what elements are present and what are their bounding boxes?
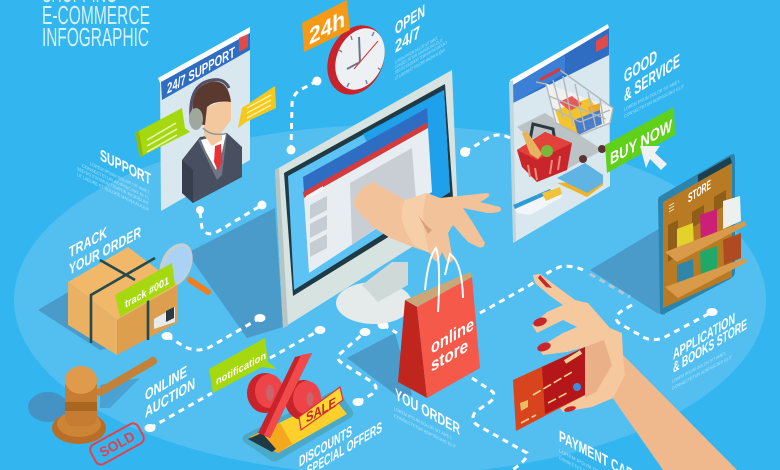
label: application & books store: APPLICATION [673, 310, 735, 364]
icon: 24h tag: 24h [309, 6, 345, 51]
label: payment card [559, 427, 641, 470]
label: you order: YOU ORDER [395, 384, 460, 439]
label: open 24/7: UT LABORE ET DOLORE MAGNA ALIQUA [395, 47, 445, 82]
label: support: SUPPORT [100, 146, 151, 189]
title: E-COMMERCE [42, 0, 150, 30]
ticket [513, 187, 562, 215]
label: application & books store: CONSECTETUR ADIPISICING ELIT [672, 354, 732, 392]
label: open 24/7: CONSECTETUR ADIPISICING ELIT, [395, 38, 443, 71]
buy now button [605, 107, 675, 173]
stand [336, 282, 412, 324]
panel: 24/7 support [135, 27, 276, 211]
label: support: SED DO EIUSMOD TEMPOR INCIDIDUNT [77, 166, 149, 207]
label: open 24/7 [395, 0, 447, 82]
panel: goods [509, 24, 613, 243]
shirt [557, 163, 603, 197]
buy now button: BUY NOW [610, 115, 673, 169]
label: online auction: AUCTION [145, 374, 195, 422]
label: open 24/7: LOREM IPSUM DOLOR SIT AMET, [395, 35, 438, 66]
label: track your order: YOUR ORDER [69, 223, 141, 279]
connector end dots [144, 76, 718, 432]
bezel [275, 70, 458, 328]
magnifier [153, 238, 208, 292]
shopping basket [517, 124, 572, 182]
label: good & service [624, 46, 684, 120]
shopping cart [517, 69, 613, 170]
percent sign [247, 353, 321, 438]
shopping bag: online [431, 313, 474, 359]
label: discounts & special offers [298, 419, 382, 470]
icon: clock [317, 16, 395, 104]
label: support [77, 146, 151, 213]
label: you order: CONSECTETUR ADIPISICING ELIT [394, 413, 456, 451]
label: support: CONSECTETUR ADIPISICING ELIT, [82, 163, 149, 202]
monitor [275, 70, 458, 328]
label: application & books store: LOREM IPSUM DOLOR SIT AMET, [672, 351, 726, 385]
label: application & books store [672, 310, 747, 392]
sale tag: SALE [306, 394, 336, 427]
label: support: UT LABORE ET DOLORE MAGNA ALIQUA [77, 172, 150, 213]
payment card [513, 347, 585, 431]
parcel box [68, 247, 178, 355]
label: you order [394, 384, 460, 451]
tablet store [658, 154, 747, 315]
dotted connectors [150, 81, 712, 470]
title [42, 0, 150, 52]
shopping bag: store [431, 335, 468, 377]
panel: 24/7 support: 24/7 SUPPORT [167, 44, 235, 98]
title: INFOGRAPHIC [42, 22, 149, 52]
sold stamp: SOLD [97, 428, 137, 460]
notification bubble: notification [216, 350, 266, 388]
sold stamp [88, 421, 146, 467]
agent [182, 80, 242, 203]
phone with percent [242, 353, 353, 462]
label: good & service: GOOD [624, 46, 657, 88]
notification bubble [209, 338, 277, 393]
speech bubble: green [135, 108, 190, 157]
icon: cursor [640, 146, 667, 170]
label: open 24/7: 24/7 [395, 21, 420, 57]
label: good & service: & SERVICE [624, 50, 680, 107]
speech bubble: yellow [238, 86, 276, 128]
tablet store: STORE [688, 177, 711, 207]
tracking tag: track #001 [125, 273, 169, 311]
shadows [28, 208, 665, 422]
label: discounts & special offers: DISCOUNTS [299, 422, 352, 470]
isometric platform [14, 125, 766, 470]
label: good & service: CONSECTETUR ADIPISICING ELIT [624, 84, 684, 120]
label: online auction: ONLINE [145, 362, 187, 405]
label: track your order: TRACK [69, 223, 107, 262]
arm and hand with card [513, 274, 737, 470]
label: good & service: LOREM IPSUM DOLOR SIT AMET, [624, 79, 680, 113]
label: track your order [69, 223, 141, 279]
label: support: LOREM IPSUM DOLOR SIT AMET, [90, 161, 150, 196]
label: open 24/7: SED DO EIUSMOD TEMPOR INCIDIDUNT [395, 40, 447, 76]
shopping bag [398, 248, 480, 398]
gavel [52, 361, 153, 444]
book shelf [665, 196, 747, 298]
label: you order: LOREM IPSUM DOLOR SIT AMET, [394, 406, 452, 441]
hand reaching out of monitor [353, 182, 501, 263]
